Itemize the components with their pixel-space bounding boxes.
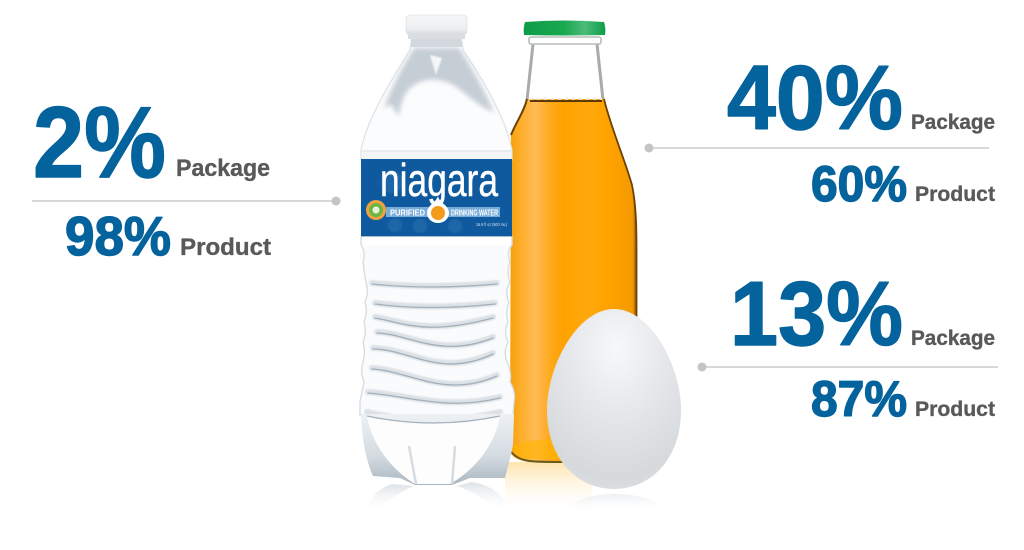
stat: 40% package: 40% [727, 48, 903, 149]
jar glass neck [527, 37, 603, 100]
stat: 40% package [727, 48, 995, 149]
bottle ribbed body [360, 237, 514, 420]
stat: 87% product: 87% [811, 371, 907, 427]
stat group: glass jar 40% package, 60% product [644, 48, 995, 212]
jar floor glow [505, 462, 592, 512]
stat: 2% package: 2% [33, 87, 166, 199]
stat: 13% package [730, 264, 995, 365]
bottle logo: niagara: niagara [380, 154, 498, 206]
icon: recycling seal [366, 200, 386, 220]
stat: 2% package [33, 87, 270, 199]
jar amber liquid [510, 99, 636, 462]
bottle base [361, 414, 514, 485]
label stripe: purified drinking water [386, 207, 500, 218]
illustration: glass juice jar [505, 20, 636, 512]
bottle label band [361, 159, 512, 237]
leader line: water bottle [32, 196, 340, 206]
label stripe: purified drinking water: DRINKING WATER [451, 208, 498, 218]
egg shadow reflection [562, 494, 668, 512]
leader line: glass jar [644, 144, 989, 152]
label volume text: 16.9 fl oz (500 mL) [476, 222, 507, 227]
stat: 87% product: Product [915, 397, 995, 421]
stat: 60% product: 60% [811, 156, 907, 212]
label tree pattern [381, 171, 462, 233]
icon: orange water drop [427, 196, 449, 223]
stat: 60% product: Product [915, 182, 995, 206]
illustration: niagara water bottle [360, 15, 514, 512]
stat group: egg 13% package, 87% product [698, 264, 998, 427]
bottle reflection [366, 482, 510, 512]
stat: 60% product [811, 156, 995, 212]
stat: 13% package: Package [911, 326, 995, 350]
stat: 2% package: Package [176, 155, 270, 182]
stat: 98% product [65, 205, 271, 267]
stat: 98% product: Product [180, 234, 271, 261]
jar green lid [524, 20, 605, 36]
bottle shoulder [361, 42, 512, 160]
label stripe: purified drinking water: PURIFIED [390, 208, 425, 218]
stat: 13% package: 13% [730, 264, 903, 365]
stat group: water bottle 2% package, 98% product [32, 87, 340, 267]
illustration: egg [547, 309, 681, 512]
bottle white cap [406, 15, 467, 47]
stat: 40% package: Package [911, 110, 995, 134]
leader line: egg [698, 362, 998, 372]
stat: 98% product: 98% [65, 205, 171, 267]
egg shell [547, 309, 681, 489]
stat: 87% product [811, 371, 995, 427]
